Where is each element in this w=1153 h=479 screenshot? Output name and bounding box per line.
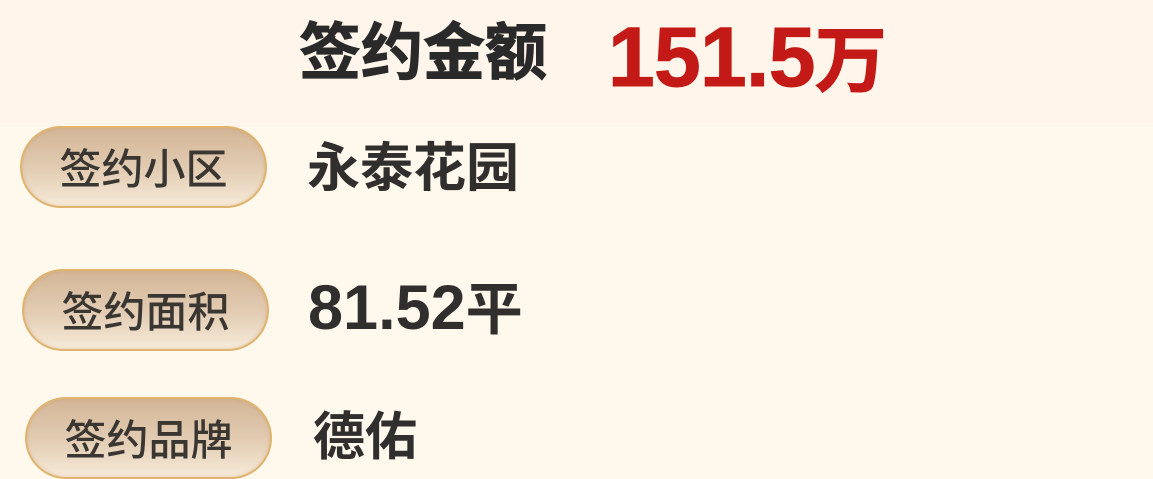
label pill: community <box>20 126 267 208</box>
label pill: area: 签约面积 <box>61 289 230 336</box>
value: brand: 德佑 <box>313 409 417 467</box>
value: community: 永泰花园 <box>307 139 519 198</box>
label pill: community: 签约小区 <box>59 146 228 193</box>
label pill: area <box>22 269 269 351</box>
label pill: brand: 签约品牌 <box>64 417 232 464</box>
header band <box>0 0 1153 127</box>
heading: signing amount: 签约金额 <box>299 19 547 88</box>
value: area: 81.52平 <box>308 273 523 343</box>
value: signing amount: 151.5万 <box>608 10 887 104</box>
label pill: brand <box>25 397 272 479</box>
